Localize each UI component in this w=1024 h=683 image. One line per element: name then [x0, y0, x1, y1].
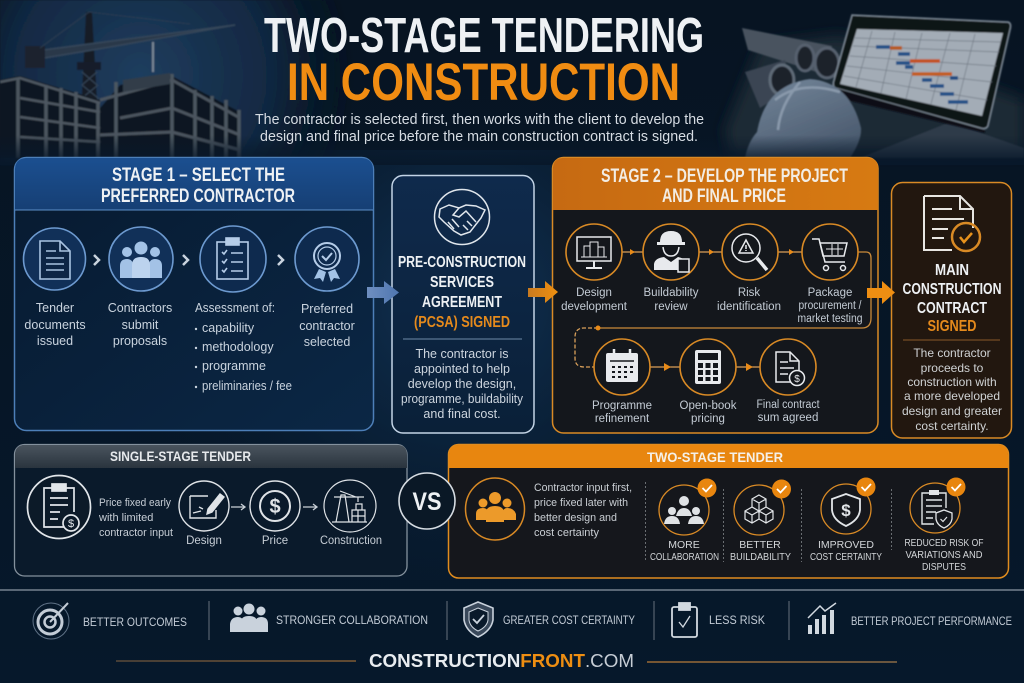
heading: single-stage: SINGLE-STAGE TENDER [110, 448, 251, 464]
header fade into page [0, 135, 1024, 165]
icon: tender document [24, 228, 86, 290]
step labels row 2: Final contract [756, 399, 820, 411]
PCSA description: programme, buildability [401, 392, 524, 406]
heading: stage 1: STAGE 1 – SELECT THE [112, 164, 285, 186]
heading: PCSA: PRE-CONSTRUCTION [398, 254, 526, 271]
icon: signed contract [924, 196, 980, 251]
heading: stage 2: STAGE 2 – DEVELOP THE PROJECT [601, 165, 848, 187]
panel: two-stage tender [448, 444, 1008, 578]
icon: design [179, 481, 229, 531]
benefit labels: IMPROVED [818, 539, 874, 551]
arrow [303, 504, 317, 510]
single-stage description: Price fixed early [99, 497, 171, 509]
step labels row 2: sum agreed [758, 412, 818, 424]
main contract description: proceeds to [921, 361, 984, 375]
assessment list: Assessment of: [195, 301, 275, 315]
step labels row 1 [561, 287, 862, 325]
main contract description: design and greater [902, 404, 1002, 418]
step labels: proposals [113, 334, 167, 348]
step labels: submit [122, 318, 159, 332]
main contract description: a more developed [904, 389, 1000, 403]
label: GREATER COST CERTAINTY [503, 613, 635, 627]
benefit labels: COST CERTAINTY [810, 551, 882, 563]
step labels: Tender [36, 301, 74, 315]
arrow: stage 2 to main contract [867, 281, 895, 304]
VS badge [399, 473, 455, 529]
step labels: Construction [320, 535, 382, 547]
step labels: documents [24, 318, 86, 332]
benefit labels [650, 537, 984, 573]
icon: package procurement cart [802, 224, 858, 280]
step labels: contractor [299, 319, 355, 333]
header image: crane and building under construction [0, 0, 380, 165]
heading: stage 1: PREFERRED CONTRACTOR [101, 185, 295, 207]
label: BETTER OUTCOMES [83, 615, 187, 629]
PCSA description: develop the design, [408, 377, 516, 391]
icon: rising chart [808, 603, 836, 634]
step labels: selected [304, 335, 350, 349]
icon: design development [566, 224, 622, 280]
title: IN CONSTRUCTION [287, 53, 680, 112]
arrow chevron [278, 255, 283, 265]
step labels row 1: identification [717, 301, 781, 313]
arrow chevron [94, 255, 99, 265]
benefit labels: MORE [668, 539, 700, 551]
icon: priced clipboard [28, 476, 90, 538]
icon: target [33, 603, 69, 639]
benefit labels: BETTER [739, 539, 781, 551]
benefit labels: BUILDABILITY [730, 551, 791, 563]
building left [0, 76, 100, 158]
assessment list: programme [202, 359, 266, 373]
footer brand: CONSTRUCTION FRONT.COM [369, 651, 634, 671]
icon: people [230, 604, 268, 632]
process connectors [575, 249, 871, 371]
step labels [186, 535, 382, 547]
title [264, 9, 704, 112]
icon: priced clipboard: $ [68, 518, 74, 530]
label: LESS RISK [709, 613, 765, 627]
step labels row 2: pricing [691, 413, 725, 425]
single-stage description: with limited [98, 512, 153, 524]
icon: contractors [109, 227, 173, 291]
step labels: Price [262, 535, 288, 547]
panel: main construction contract [892, 182, 1012, 438]
icon: assessment clipboard [200, 226, 266, 292]
dashed separators [646, 482, 892, 562]
step labels row 1: procurement / [798, 300, 862, 312]
two-stage description: Contractor input first, [534, 482, 632, 494]
building right [100, 73, 240, 158]
step labels row 1: Design [576, 287, 612, 299]
heading: two-stage: TWO-STAGE TENDER [647, 449, 783, 465]
icon: clipboard [672, 603, 697, 637]
icon: buildability review [643, 224, 699, 280]
icon: open-book pricing calculator [680, 339, 736, 395]
step labels row 2: refinement [595, 413, 650, 425]
benefits bar [33, 601, 1012, 640]
VS badge: VS [412, 488, 442, 516]
benefit labels: COLLABORATION [650, 551, 719, 563]
icon: construction [324, 480, 376, 532]
heading: stage 2 [601, 165, 848, 207]
arrow: PCSA to stage 2 [528, 281, 558, 303]
benefit: more collaboration [659, 478, 716, 535]
two-stage description [534, 482, 632, 539]
gantt bars [876, 47, 968, 102]
hard hat [745, 79, 861, 158]
icon: programme refinement [594, 339, 650, 395]
panel: stage 1 [14, 158, 374, 430]
heading: PCSA [398, 254, 526, 331]
blueprint rolls [742, 28, 839, 108]
main contract description: cost certainty. [915, 419, 989, 433]
icon: price: $ [269, 496, 281, 518]
step labels row 1: Package [808, 287, 852, 299]
icon: shield [464, 602, 493, 637]
panel: single-stage tender [14, 444, 407, 576]
benefit: reduced risk [910, 478, 966, 533]
subtitle: design and final price before the main construction contract is signed. [260, 129, 698, 145]
heading: PCSA: (PCSA) SIGNED [414, 314, 510, 331]
icon: final contract sum [760, 339, 816, 395]
single-stage description: contractor input [99, 527, 173, 539]
main contract description: The contractor [913, 346, 991, 360]
step labels row 2: Open-book [680, 400, 737, 412]
panel: stage 2 [552, 158, 878, 433]
arrow: stage 1 to PCSA [367, 281, 399, 304]
arrow [231, 504, 245, 510]
icon: contractor team [466, 478, 524, 540]
paper and plans backdrop [725, 35, 1024, 155]
assessment list: methodology [202, 340, 274, 354]
label: STRONGER COLLABORATION [276, 613, 428, 627]
step labels: Design [186, 535, 222, 547]
assessment list: preliminaries / fee [202, 379, 292, 393]
step labels: issued [37, 334, 73, 348]
panel: PCSA agreement [392, 176, 534, 433]
heading: main contract: MAIN [935, 262, 969, 279]
icon: risk identification [722, 224, 778, 280]
heading: main contract: SIGNED [928, 318, 976, 335]
crane [25, 12, 235, 135]
title: TWO-STAGE TENDERING [264, 9, 704, 63]
subtitle [255, 112, 704, 145]
PCSA description [401, 347, 524, 421]
step labels: Contractors [108, 301, 172, 315]
PCSA description: and final cost. [423, 407, 501, 421]
heading: stage 1 [101, 164, 295, 207]
benefit: improved cost certainty: $ [841, 501, 851, 520]
single-stage description [98, 497, 173, 539]
laptop [833, 15, 1011, 129]
icon: price [250, 481, 300, 531]
step labels row 2 [592, 399, 820, 425]
benefit labels: DISPUTES [922, 561, 966, 573]
benefit labels: VARIATIONS AND [906, 549, 983, 561]
step labels row 1: Buildability [644, 287, 699, 299]
step labels [24, 301, 355, 349]
icon: preferred contractor badge [295, 227, 359, 291]
assessment list: capability [202, 321, 255, 335]
assessment list [195, 301, 292, 393]
step labels row 1: review [654, 301, 688, 313]
heading: PCSA: AGREEMENT [422, 294, 502, 311]
icon: handshake [434, 190, 490, 244]
step labels row 1: Risk [738, 287, 760, 299]
PCSA description: The contractor is [415, 347, 509, 361]
step labels row 1: market testing [798, 313, 862, 325]
two-stage description: price fixed later with [534, 497, 628, 509]
two-stage description: better design and [534, 512, 617, 524]
heading: main contract: CONTRACT [917, 300, 987, 317]
heading: PCSA: SERVICES [430, 274, 494, 291]
PCSA description: appointed to help [414, 362, 510, 376]
step labels row 1: development [561, 301, 628, 313]
two-stage description: cost certainty [534, 527, 599, 539]
heading: main contract [902, 262, 1002, 335]
heading: stage 2: AND FINAL PRICE [662, 185, 786, 207]
icon: final contract sum: $ [794, 374, 800, 385]
arrow chevron [183, 255, 188, 265]
benefit: improved cost certainty [821, 478, 876, 534]
step labels: Preferred [301, 302, 353, 316]
main contract description [902, 346, 1002, 433]
step labels row 2: Programme [592, 400, 652, 412]
benefit labels: REDUCED RISK OF [904, 537, 984, 549]
main contract description: construction with [907, 375, 997, 389]
benefit: better buildability [734, 480, 791, 535]
subtitle: The contractor is selected first, then works with the client to develop the [255, 112, 704, 128]
header image: plans, hard hat and laptop with gantt chart [725, 15, 1024, 158]
